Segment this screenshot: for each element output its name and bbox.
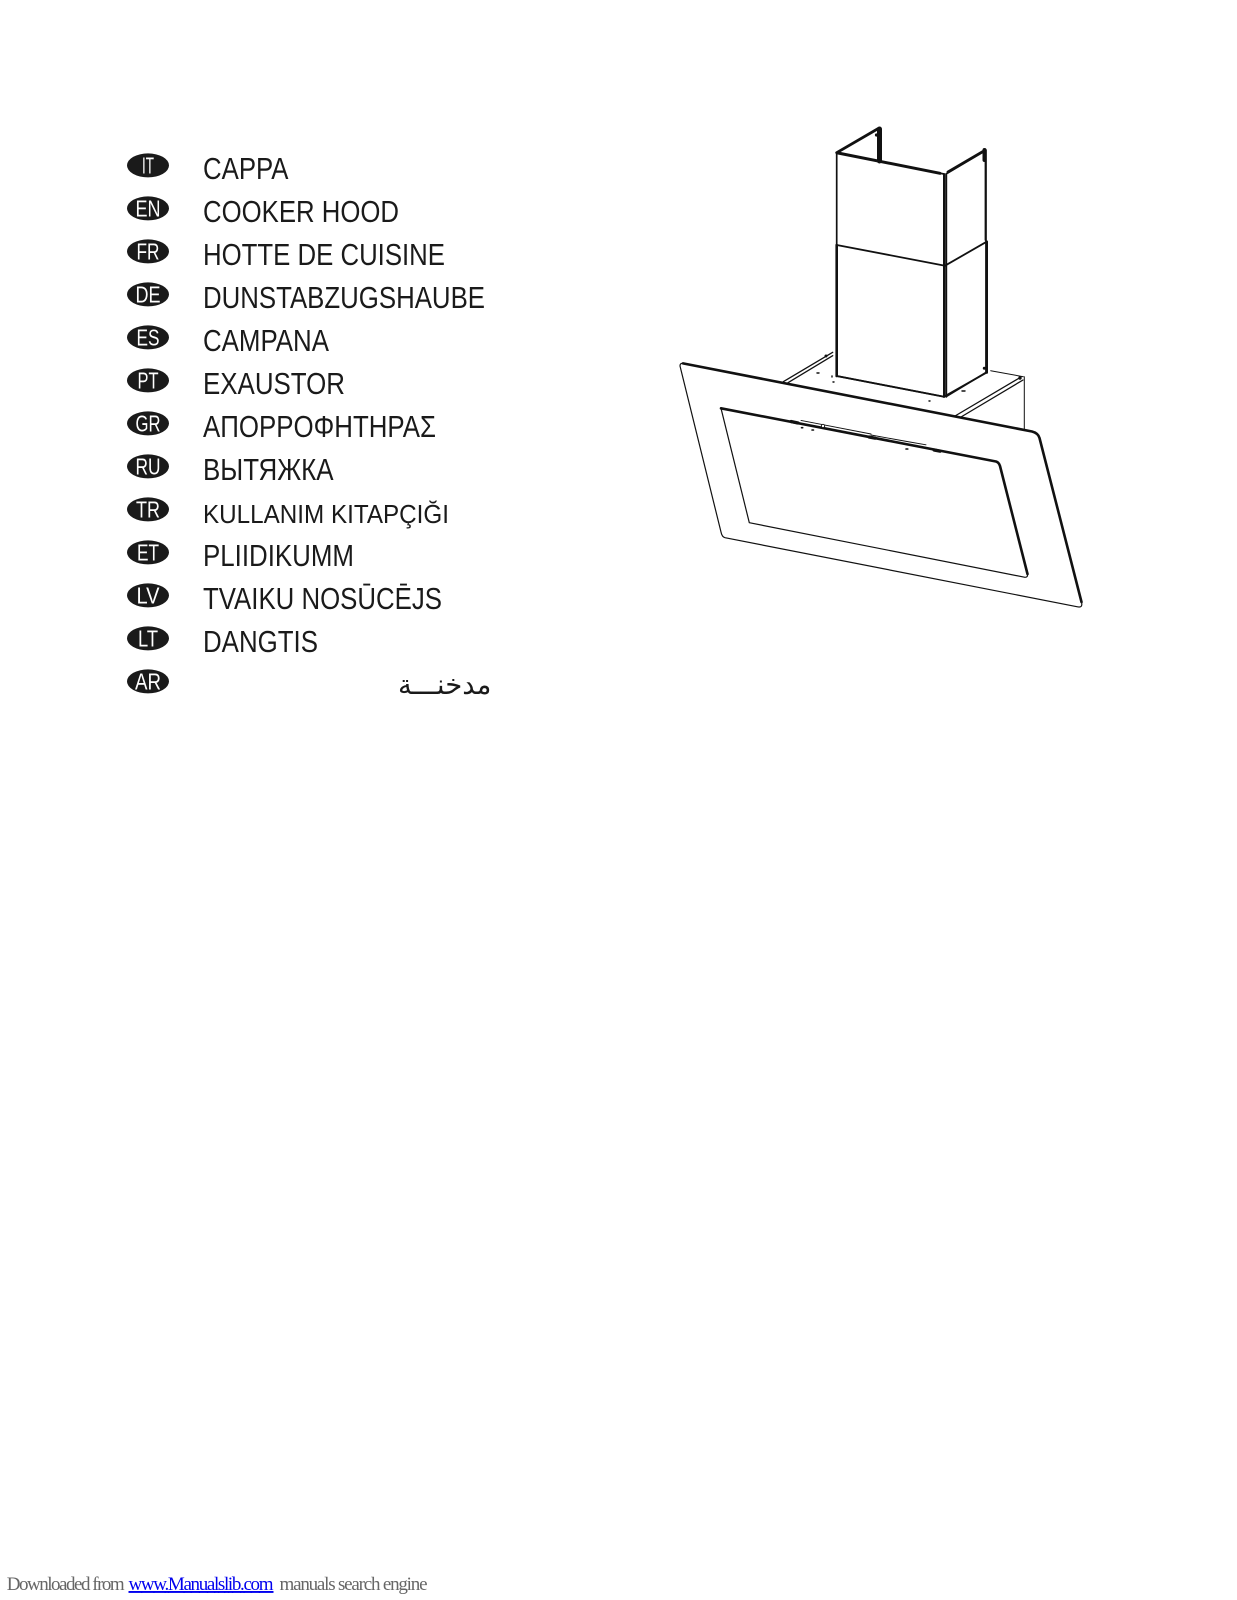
row: ET: PLIIDIKUMM [203, 538, 354, 573]
row: AR [127, 668, 491, 701]
footer line: Downloaded from [7, 1574, 125, 1595]
chimney [837, 128, 987, 397]
row: DE: DE [136, 282, 160, 308]
row: ES: ES [136, 324, 160, 350]
footer line: www.Manualslib.com [128, 1574, 274, 1595]
row: ES: CAMPANA [203, 323, 329, 358]
row: RU: ВЫТЯЖКА [203, 452, 334, 487]
row: IT [127, 151, 289, 186]
row: PT: EXAUSTOR [203, 366, 345, 401]
row: GR [127, 409, 436, 444]
row: DE [127, 280, 485, 315]
row: AR: مدخنـــة [398, 669, 491, 701]
row: LT: DANGTIS [203, 624, 318, 659]
row: ES [127, 323, 329, 358]
row: LT [127, 624, 318, 659]
row: EN: EN [136, 196, 160, 222]
row: IT: CAPPA [203, 151, 289, 186]
row: TR: KULLANIM KITAPÇIĞI [203, 499, 449, 529]
row: EN: COOKER HOOD [203, 194, 399, 229]
row: FR: HOTTE DE CUISINE [203, 237, 445, 272]
row: LV: TVAIKU NOSŪCĒJS [203, 581, 442, 616]
row: DE: DUNSTABZUGSHAUBE [203, 280, 485, 315]
language list [127, 151, 491, 701]
row: RU: RU [136, 454, 160, 480]
row: TR: TR [136, 496, 160, 522]
row: LT: LT [138, 626, 158, 652]
illustration: cooker hood [680, 128, 1082, 607]
row: EN [127, 194, 399, 229]
control strip [791, 420, 940, 451]
row: LV [127, 581, 442, 616]
row: PT: PT [138, 368, 158, 394]
row: AR: AR [135, 668, 161, 694]
inner window [721, 408, 1028, 577]
row: LV: LV [136, 582, 160, 608]
row: FR [127, 237, 445, 272]
row: TR [127, 496, 449, 529]
row: RU [127, 452, 334, 487]
mounting base and rails [783, 352, 1024, 430]
row: IT: IT [142, 152, 154, 178]
back flap [837, 128, 986, 240]
row: GR: ΑΠΟΡΡΟΦΗΤΗΡΑΣ [203, 409, 436, 444]
row: ET [127, 538, 354, 573]
footer line: manuals search engine [280, 1574, 428, 1595]
row: PT [127, 366, 345, 401]
row: FR: FR [136, 238, 160, 264]
row: ET: ET [137, 540, 159, 566]
footer line [7, 1574, 427, 1595]
row: GR: GR [136, 410, 160, 436]
outer glass panel [680, 363, 1082, 607]
